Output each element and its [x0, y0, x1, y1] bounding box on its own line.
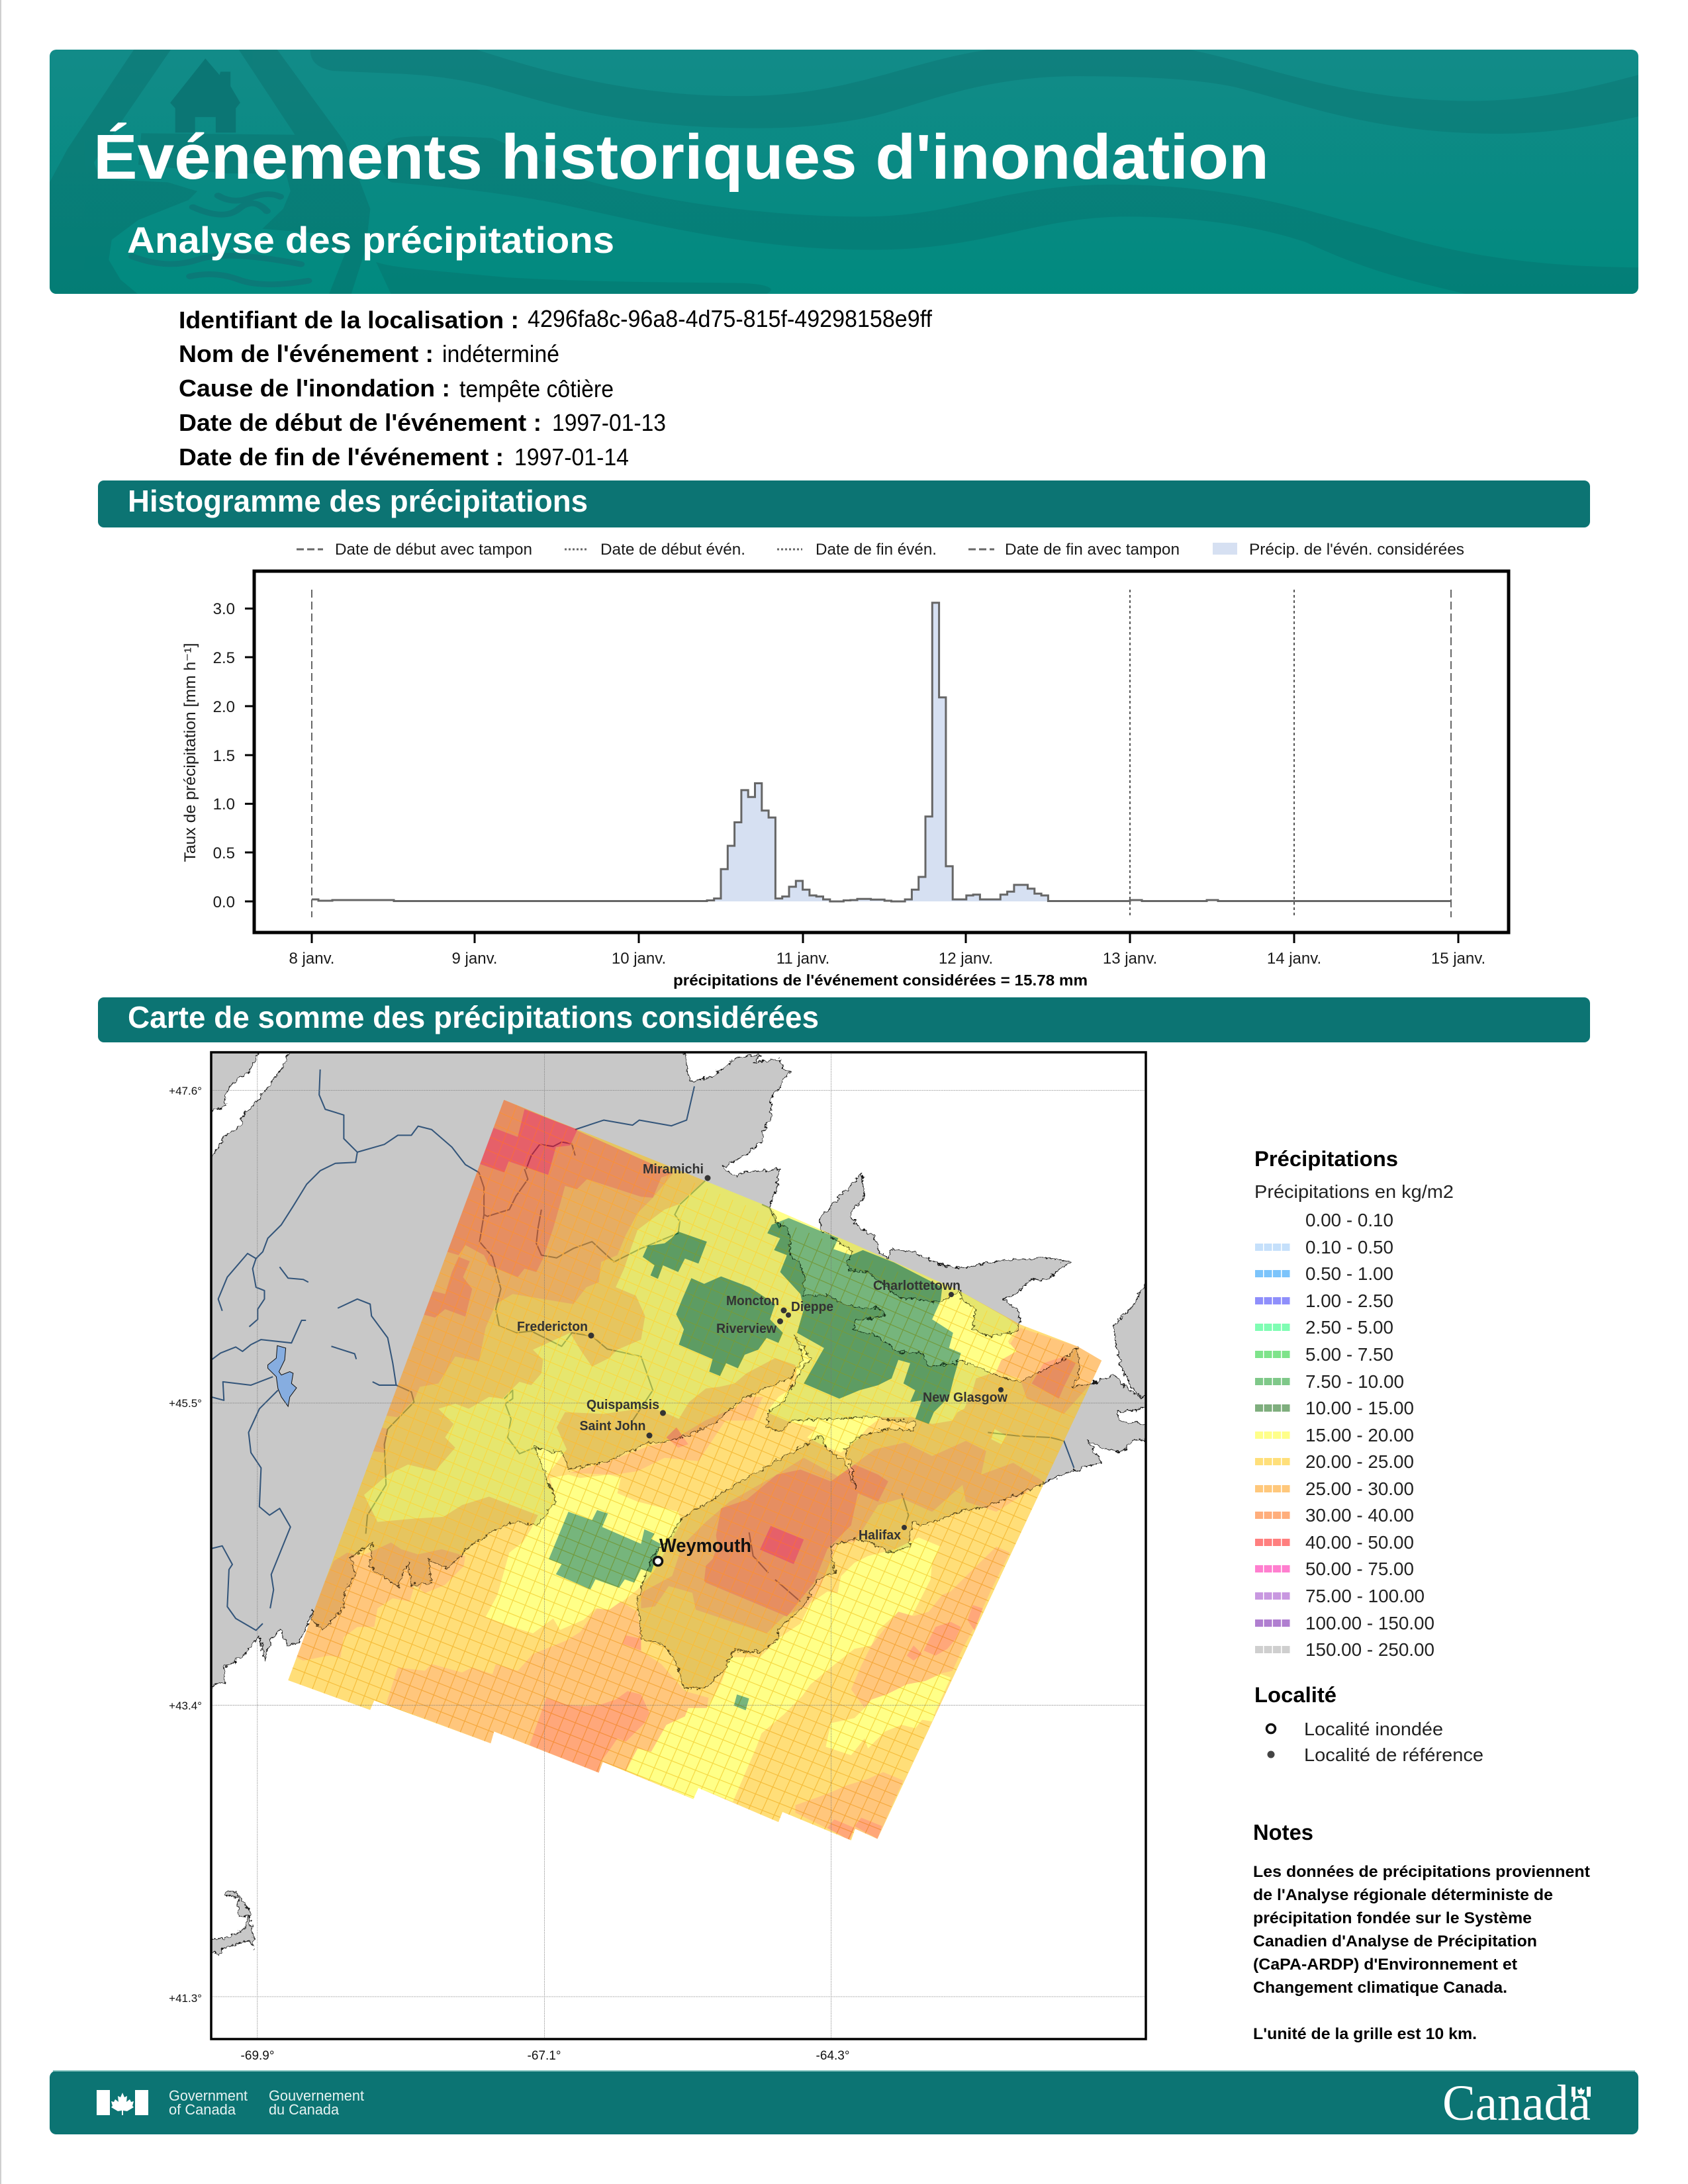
zones: 40-50 [480, 1109, 804, 1564]
event information block: Nom de l'événement : [179, 340, 434, 367]
latitude and longitude lines [211, 1052, 1146, 2039]
map place labels: Quispamsis [586, 1398, 659, 1412]
event information block: Date de fin de l'événement : [179, 443, 504, 471]
map axis labels: +41.3° [169, 1992, 202, 2005]
y axis ticks and labels: 3.0 [213, 600, 235, 618]
legend: precipitation: 10.00 - 15.00 [1305, 1398, 1414, 1418]
x axis ticks and labels: 12 janv. [939, 950, 993, 968]
x axis ticks and labels: 13 janv. [1103, 950, 1157, 968]
zones: 10-15 [549, 1218, 961, 1710]
y axis ticks and labels: 0.5 [213, 844, 235, 862]
chart legend: Précip. de l'évén. considérées [1249, 541, 1464, 559]
y axis ticks and labels: 2.0 [213, 698, 235, 716]
legend: precipitation: 0.00 - 0.10 [1305, 1210, 1393, 1230]
y axis title: Taux de précipitation [mm h⁻¹] [181, 643, 199, 862]
coastline overlay [308, 1207, 1091, 1692]
land [202, 1046, 1154, 1954]
legend: precipitation: 40.00 - 50.00 [1305, 1532, 1414, 1553]
icon: Canada flag [97, 2090, 148, 2115]
map axis labels: +47.6° [169, 1085, 202, 1097]
event information block: 4296fa8c-96a8-4d75-815f-49298158e9ff [528, 305, 933, 332]
event information block: 1997-01-14 [514, 443, 629, 471]
event precipitation fill [707, 603, 1048, 901]
legend: precipitation: 150.00 - 250.00 [1305, 1639, 1434, 1660]
St Lawrence estuary [202, 1046, 293, 1158]
legend: precipitation: 50.00 - 75.00 [1305, 1559, 1414, 1579]
section heading: histogram: Histogramme des précipitations [128, 484, 588, 518]
map frame [211, 1052, 1146, 2039]
legend: precipitation: Précipitations [1254, 1147, 1398, 1171]
government wordmark: Gouvernement [269, 2087, 365, 2104]
map place labels: Fredericton [517, 1320, 588, 1334]
chart legend: Date de fin avec tampon [1005, 541, 1180, 559]
notes: (CaPA-ARDP) d'Environnement et [1253, 1956, 1517, 1974]
government wordmark: Government [169, 2087, 248, 2104]
x axis ticks and labels: 15 janv. [1431, 950, 1485, 968]
zones: 30-40 [422, 1100, 1076, 1841]
notes: Les données de précipitations proviennent [1253, 1863, 1590, 1881]
x axis ticks and labels [289, 933, 1485, 968]
legend: locality [1254, 1683, 1483, 1765]
map axis labels [169, 1085, 849, 2063]
event information block: Date de début de l'événement : [179, 409, 541, 436]
map place labels: Moncton [726, 1294, 779, 1308]
map axis labels: +45.5° [169, 1397, 202, 1410]
y axis ticks and labels: 0.0 [213, 893, 235, 911]
chart legend: Date de début avec tampon [335, 541, 532, 559]
legend: precipitation: 0.10 - 0.50 [1305, 1237, 1393, 1257]
footer bar [50, 2070, 1638, 2134]
map place labels [517, 1162, 1008, 1566]
x axis ticks and labels: 9 janv. [452, 950, 497, 968]
map place labels: Saint John [580, 1419, 646, 1433]
notes: Canadien d'Analyse de Précipitation [1253, 1933, 1537, 1950]
section heading: map: Carte de somme des précipitations considérées [128, 1000, 819, 1034]
base: 20-25 [288, 1100, 1102, 1841]
title: Événements historiques d'inondation [93, 122, 1269, 193]
legend: precipitation: 15.00 - 20.00 [1305, 1425, 1414, 1445]
precipitation grid [288, 1100, 1102, 1841]
Cape Cod [205, 1890, 254, 1954]
subtitle: Analyse des précipitations [127, 219, 614, 261]
event information block: 1997-01-13 [552, 409, 666, 436]
legend: precipitation: 1.00 - 2.50 [1305, 1291, 1393, 1311]
legend: precipitation: 100.00 - 150.00 [1305, 1613, 1434, 1633]
legend: precipitation: 7.50 - 10.00 [1305, 1371, 1404, 1392]
x axis ticks and labels: 8 janv. [289, 950, 334, 968]
precipitation map [199, 1039, 1178, 2052]
y axis ticks and labels [213, 600, 254, 911]
lake [268, 1345, 297, 1406]
notes: précipitation fondée sur le Système [1253, 1909, 1532, 1927]
notes: de l'Analyse régionale déterministe de [1253, 1886, 1553, 1904]
event information block: Cause de l'inondation : [179, 375, 450, 402]
grid cell lines [293, 1105, 1096, 1894]
map place labels: Halifax [859, 1528, 901, 1543]
zones: 15-20 [364, 1180, 1018, 1802]
event information block [179, 305, 933, 471]
section heading: histogram [98, 480, 1590, 527]
section heading: map [98, 997, 1590, 1042]
map place labels: New Glasgow [923, 1390, 1008, 1405]
legend: precipitation: 5.00 - 7.50 [1305, 1344, 1393, 1365]
x axis ticks and labels: 11 janv. [776, 950, 829, 968]
event information block: Identifiant de la localisation : [179, 306, 519, 334]
chart total caption: précipitations de l'événement considérées = 15.78 mm [673, 972, 1088, 989]
legend: precipitation: 2.50 - 5.00 [1305, 1317, 1393, 1338]
map axis labels: -69.9° [241, 2049, 274, 2063]
event information block: indéterminé [442, 340, 559, 367]
notes: Changement climatique Canada. [1253, 1979, 1507, 1997]
notes: L'unité de la grille est 10 km. [1253, 2025, 1477, 2043]
legend: locality: Localité de référence [1304, 1745, 1483, 1765]
legend: precipitation: Précipitations en kg/m2 [1254, 1181, 1454, 1202]
Canada wordmark: Canada [1442, 2075, 1591, 2131]
y axis ticks and labels: 1.0 [213, 796, 235, 813]
legend: precipitation: 0.50 - 1.00 [1305, 1263, 1393, 1284]
legend: precipitation: 75.00 - 100.00 [1305, 1586, 1425, 1606]
map place labels: Weymouth [659, 1535, 751, 1557]
map place labels: Dieppe [791, 1300, 833, 1314]
map axis labels: -67.1° [528, 2049, 561, 2063]
chart legend [297, 541, 1464, 559]
header banner [50, 50, 1646, 295]
precipitation step line [312, 603, 1451, 901]
map place labels: Riverview [716, 1322, 776, 1336]
x axis ticks and labels: 14 janv. [1267, 950, 1321, 968]
zones: 25-30 [297, 1100, 1102, 1840]
legend: locality: Localité inondée [1304, 1719, 1443, 1739]
y axis ticks and labels: 2.5 [213, 649, 235, 667]
legend: precipitation: 20.00 - 25.00 [1305, 1451, 1414, 1472]
notes [1253, 1820, 1590, 2043]
map place labels: Miramichi [643, 1162, 704, 1177]
government wordmark [169, 2087, 365, 2118]
y axis ticks and labels: 1.5 [213, 747, 235, 765]
x axis ticks and labels: 10 janv. [612, 950, 666, 968]
map axis labels: +43.4° [169, 1700, 202, 1712]
chart legend: Date de début évén. [600, 541, 745, 559]
legend: precipitation [1254, 1147, 1454, 1660]
legend: locality: Localité [1254, 1683, 1336, 1707]
map place labels: Charlottetown [873, 1279, 961, 1293]
government wordmark: du Canada [269, 2101, 339, 2118]
histogram chart [181, 571, 1509, 968]
map axis labels: -64.3° [816, 2049, 849, 2063]
notes: Notes [1253, 1820, 1313, 1844]
reference date lines [312, 590, 1451, 917]
chart legend: Date de fin évén. [816, 541, 937, 559]
legend: precipitation: 25.00 - 30.00 [1305, 1479, 1414, 1499]
legend: precipitation: 30.00 - 40.00 [1305, 1505, 1414, 1525]
government wordmark: of Canada [169, 2101, 236, 2118]
event information block: tempête côtière [459, 375, 614, 402]
rivers [211, 1069, 1074, 1630]
